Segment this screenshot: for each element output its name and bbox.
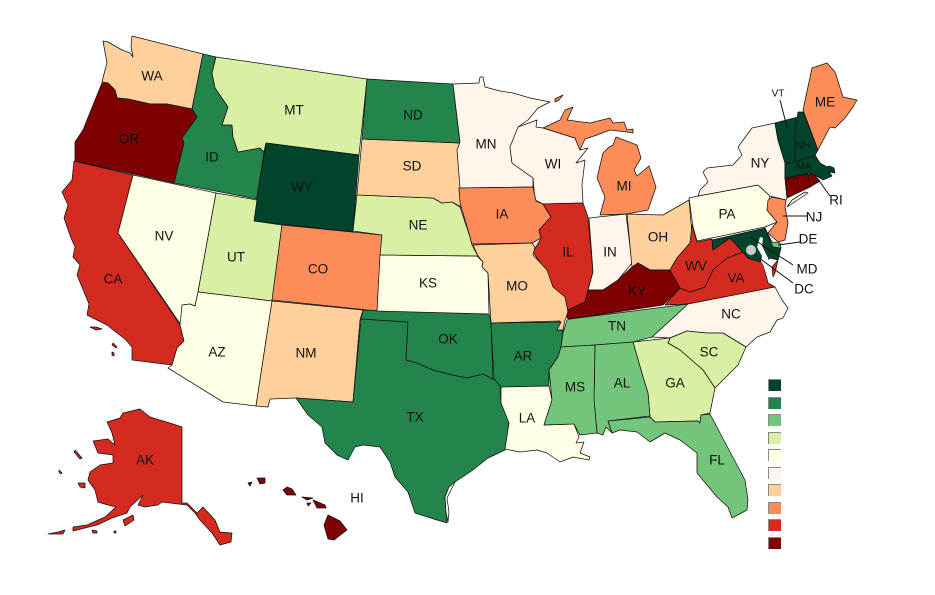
state: Oklahoma: [361, 310, 493, 379]
state: New Hampshire: NH: [796, 140, 810, 152]
state: New Mexico: [256, 301, 363, 407]
state: Montana: [212, 57, 367, 155]
state: New Hampshire: [795, 112, 818, 162]
state: Virginia: [665, 252, 778, 305]
state: Maryland: MD: [796, 262, 818, 276]
state: Utah: [198, 193, 282, 301]
state: Idaho: ID: [205, 150, 219, 164]
state: Oregon: OR: [119, 132, 139, 146]
state: Kansas: KS: [419, 276, 437, 290]
marker: District of Columbia: [746, 245, 814, 296]
state: Delaware: [765, 228, 817, 248]
state: Indiana: [588, 214, 632, 290]
state: Kansas: [377, 255, 489, 314]
state: New Mexico: NM: [296, 346, 316, 360]
state: Connecticut: CT: [787, 176, 801, 188]
state: Arkansas: [491, 322, 563, 387]
state: South Carolina: [668, 331, 746, 388]
state: Colorado: CO: [308, 262, 328, 276]
state: Nevada: NV: [155, 228, 173, 244]
state: Maine: [803, 63, 857, 150]
state: Pennsylvania: [689, 185, 777, 241]
state: New Jersey: [767, 197, 822, 242]
state: Georgia: [633, 338, 715, 423]
state: Massachusetts: MA: [796, 162, 812, 172]
state: Arizona: AZ: [208, 344, 226, 360]
state: Wyoming: [253, 143, 359, 232]
legend: [768, 379, 781, 549]
state: Tennessee: TN: [608, 318, 626, 334]
state: South Dakota: [357, 139, 463, 207]
state: Maryland: [712, 228, 818, 282]
state: Maine: ME: [815, 94, 835, 110]
state: South Dakota: SD: [403, 158, 422, 174]
state: Wyoming: WY: [291, 180, 313, 194]
state: Florida: FL: [709, 452, 725, 468]
state: Florida: [608, 414, 748, 518]
state: Minnesota: MN: [476, 136, 496, 152]
state: New Jersey: NJ: [806, 210, 822, 224]
state: Mississippi: MS: [565, 380, 585, 394]
state: Texas: TX: [406, 410, 424, 424]
state: West Virginia: WV: [685, 258, 707, 274]
state: Alabama: [594, 342, 650, 435]
state: Ohio: [627, 200, 692, 270]
state: Minnesota: [453, 77, 550, 188]
state: North Carolina: NC: [721, 306, 741, 322]
state: Rhode Island: RI: [829, 192, 843, 208]
state: Missouri: [473, 243, 568, 330]
state: North Dakota: ND: [403, 108, 423, 122]
state: Alaska: [48, 409, 232, 545]
state: Oregon: [75, 83, 197, 183]
state: Washington: WA: [141, 68, 163, 84]
state: Louisiana: [501, 386, 590, 462]
state: Illinois: IL: [562, 244, 574, 260]
state: Wisconsin: [510, 120, 588, 204]
state: Alabama: AL: [614, 376, 631, 390]
state: Kentucky: [567, 263, 680, 319]
state: Kentucky: KY: [628, 284, 646, 298]
state: Nevada: [118, 175, 216, 325]
state: Massachusetts: [785, 155, 835, 180]
state: Nebraska: NE: [409, 218, 427, 232]
state: Colorado: [272, 225, 382, 311]
state: North Carolina: [652, 287, 788, 347]
state: New York: NY: [751, 156, 769, 170]
state: Indiana: IN: [603, 244, 617, 260]
state: Arizona: [168, 292, 272, 406]
state: Montana: MT: [284, 102, 304, 118]
state: California: CA: [104, 272, 122, 286]
state: West Virginia: [670, 225, 743, 292]
state: Mississippi: [544, 345, 597, 435]
state: Louisiana: LA: [519, 410, 535, 426]
state: Washington: [102, 36, 203, 109]
state: Arkansas: AR: [514, 348, 533, 364]
state: Iowa: IA: [496, 206, 508, 222]
state: Vermont: VT: [772, 88, 784, 100]
state: Connecticut: [785, 174, 810, 198]
state: Michigan: MI: [616, 178, 632, 194]
state: Wisconsin: WI: [545, 156, 561, 172]
state: North Dakota: [362, 79, 460, 143]
state: Nebraska: [353, 195, 478, 256]
state: Missouri: MO: [506, 278, 528, 294]
state: Illinois: [533, 203, 593, 310]
state: Michigan: [543, 95, 656, 215]
state: Idaho: [174, 54, 264, 199]
state: South Carolina: SC: [700, 344, 719, 360]
state: Delaware: DE: [799, 232, 817, 246]
state: Oklahoma: OK: [438, 332, 458, 346]
state: Virginia: VA: [727, 270, 745, 286]
state: Pennsylvania: PA: [718, 206, 736, 222]
state: Utah: UT: [227, 250, 245, 264]
state: Hawaii: HI: [350, 490, 364, 506]
state: Vermont: [772, 88, 798, 163]
state: New York: [698, 123, 808, 207]
state: Alaska: AK: [136, 452, 154, 468]
state: Rhode Island: [808, 173, 843, 208]
state: Texas: [296, 319, 509, 523]
state: Iowa: [459, 187, 551, 244]
marker: District of Columbia: DC: [794, 282, 814, 296]
state: Ohio: OH: [648, 230, 668, 244]
state: Tennessee: [561, 304, 688, 347]
state: California: [62, 161, 184, 365]
state: Georgia: GA: [665, 376, 685, 390]
state: Hawaii: [248, 478, 364, 540]
